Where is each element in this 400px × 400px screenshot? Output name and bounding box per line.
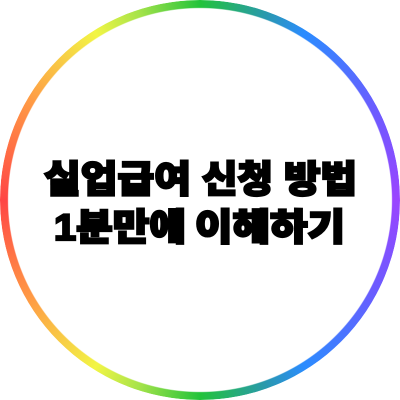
title line 1: 실업급여 [44,159,191,200]
title line 1: 방법 [284,159,357,200]
title line 1: 신청 [202,159,273,200]
title line 1 [44,159,357,200]
title line 2: 1분만에 [54,207,186,248]
title line 2 [54,207,345,248]
title line 2: 이해하기 [195,207,345,248]
